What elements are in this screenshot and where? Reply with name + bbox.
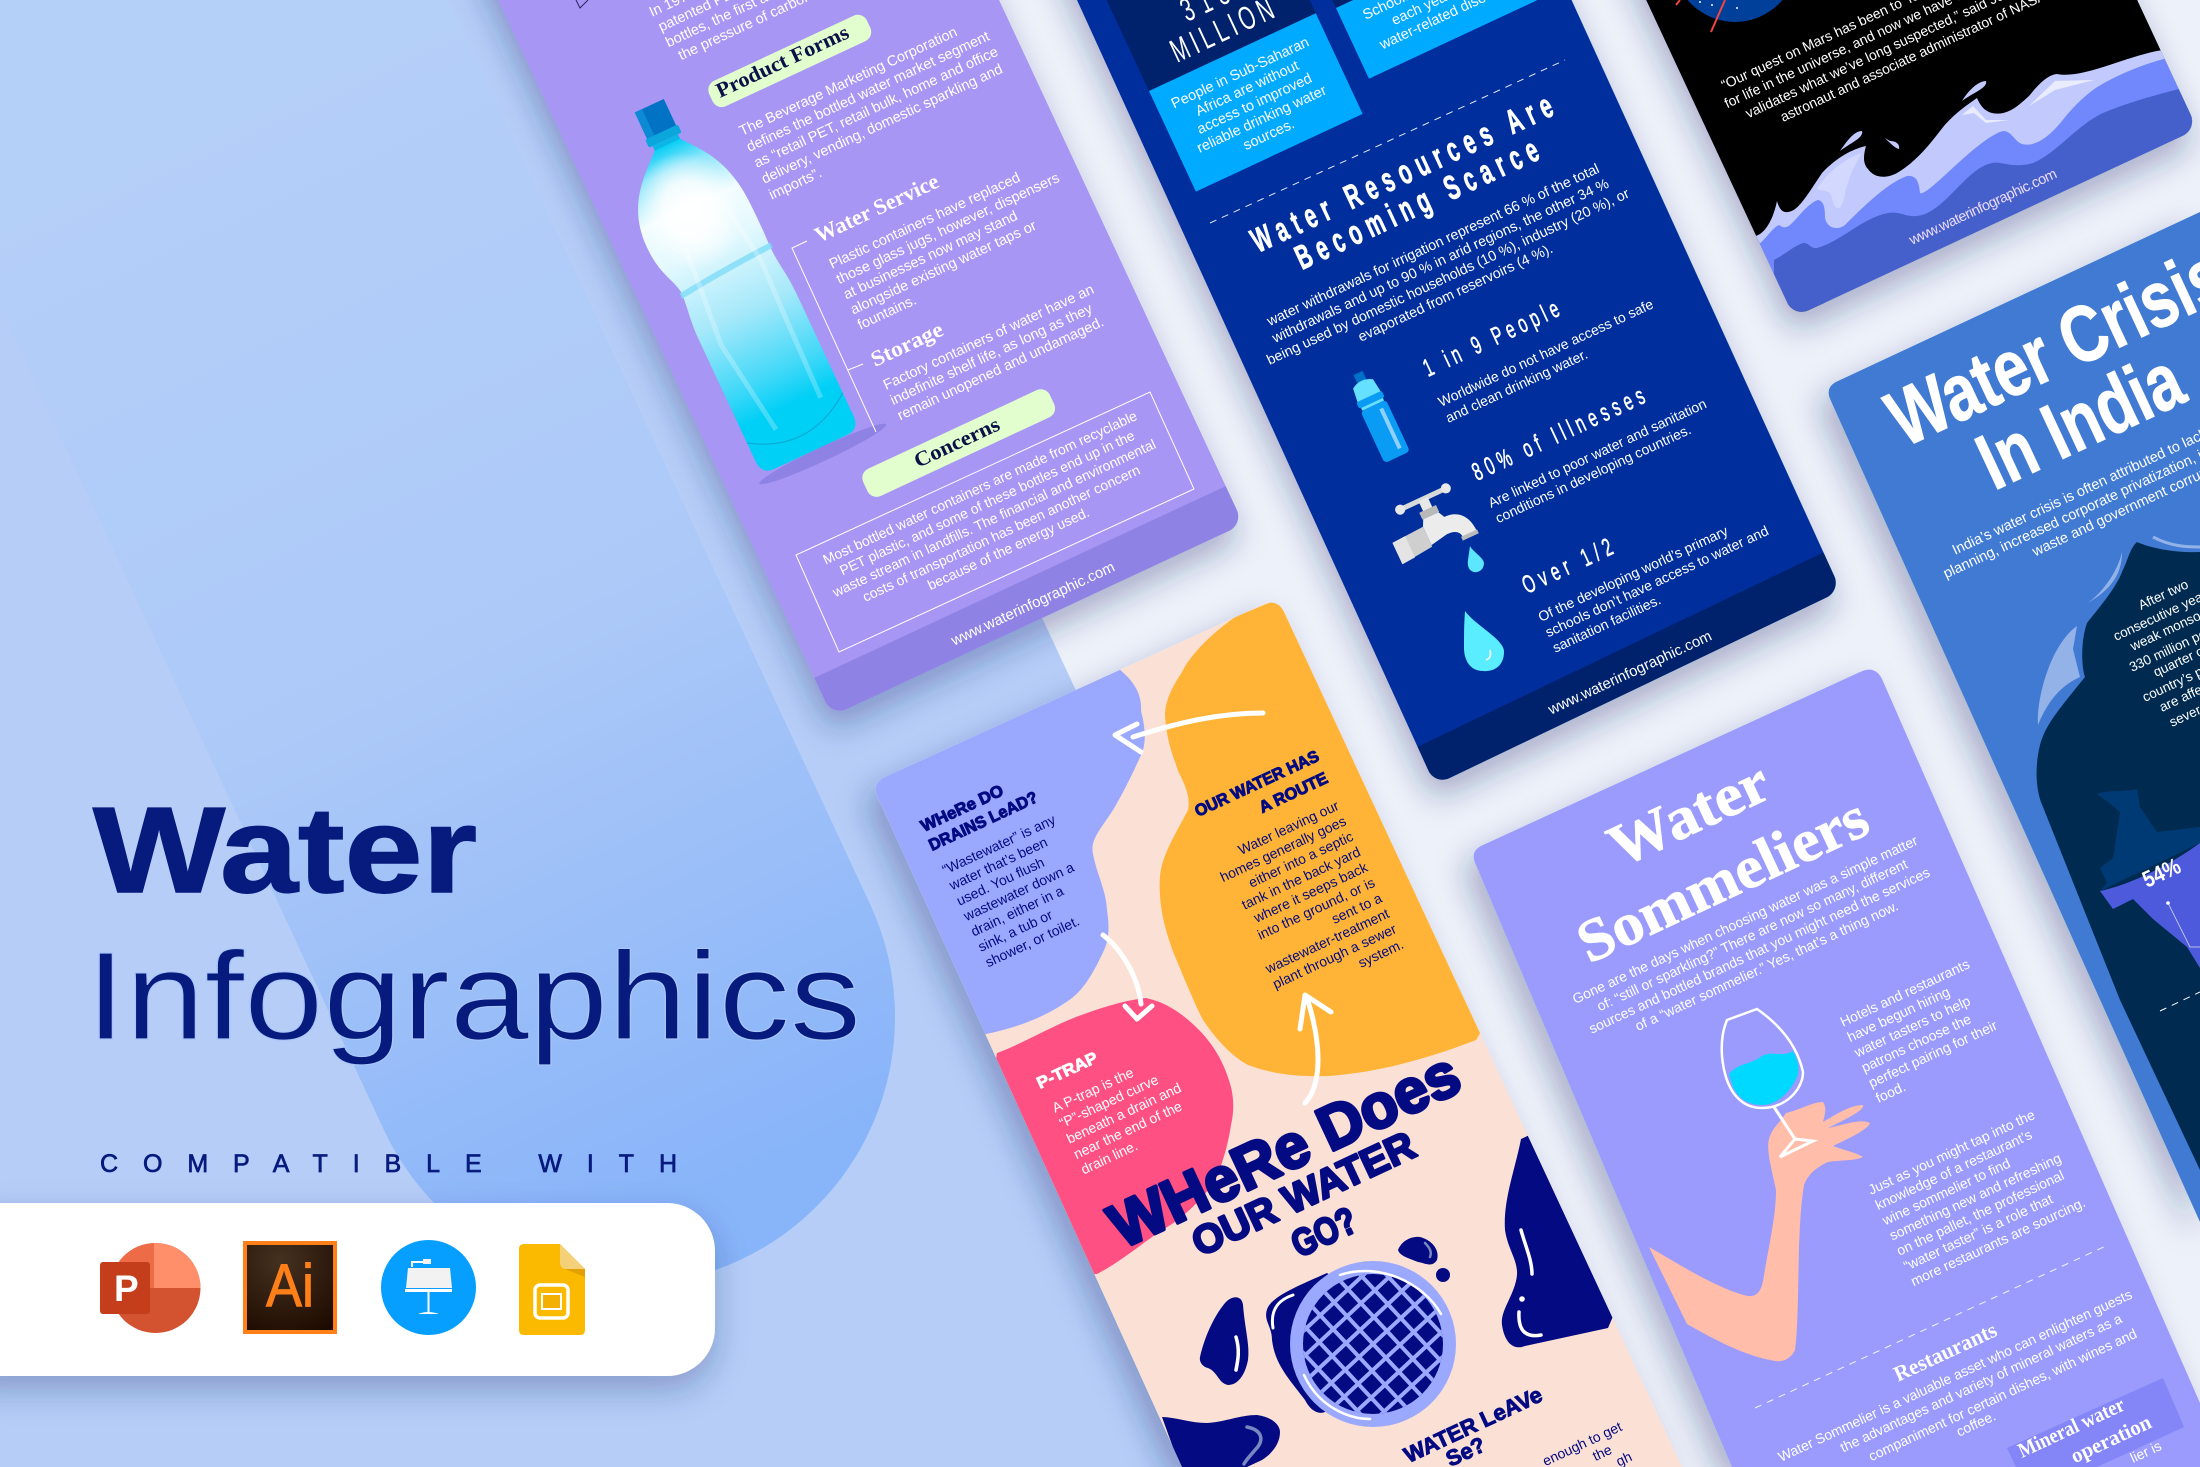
- dark blue card base: [1020, 0, 1841, 785]
- stat: over 1/2: Over 1/2: [1518, 534, 1617, 599]
- heading: Water Resources Are Becoming Scarce: Becoming Scarce: [1289, 131, 1544, 277]
- text: where do drains lead: wastewater down a: [960, 859, 1077, 924]
- text: water service paragraph: Plastic containers have replaced: [827, 170, 1023, 273]
- text: our water has a route: [1192, 747, 1407, 1008]
- text: where do drains lead: WHeRe DO: [918, 782, 1007, 836]
- stat: over 1/2: Of the developing world’s primary: [1536, 523, 1730, 625]
- text: concerns paragraph: PET plastic, and some of these bottles end up in the: [837, 427, 1137, 578]
- heading: Water Sommeliers: Water: [1598, 748, 1780, 880]
- text: our water has a route: A ROUTE: [1256, 769, 1331, 817]
- icon: Illustrator: [245, 1243, 335, 1332]
- text: restaurants paragraph: coffee.: [1954, 1407, 1998, 1440]
- text: intro paragraph: of a “water sommelier.” Yes, that’s a thing now.: [1632, 897, 1901, 1034]
- label pill: Concerns: Concerns: [910, 412, 1003, 473]
- heading: Water Sommeliers: Sommeliers: [1567, 784, 1878, 976]
- text: our water has a route: tank in the back yard: [1239, 843, 1363, 913]
- icon: falling drop: [1468, 546, 1484, 572]
- icon: white highlight dot: [1519, 1296, 1525, 1302]
- text: concerns paragraph: Most bottled water containers are made from recyclable: [820, 407, 1140, 568]
- stat: 1 in 9 people: and clean drinking water.: [1443, 346, 1590, 426]
- black card base: [1540, 0, 2197, 317]
- title: Water Infographics: Infographics: [86, 927, 861, 1066]
- blue card base: [1829, 212, 2200, 1222]
- panel: black NASA card: [1616, 0, 2200, 342]
- stat: 80% of illnesses: 80% of Illnesses: [1468, 382, 1649, 486]
- text: withdrawals paragraph: water withdrawals for irrigation represent 66 % of the total: [1264, 161, 1602, 330]
- bracket connector: [792, 241, 876, 432]
- callout: mineral water source operation: lier is: [2128, 1437, 2164, 1466]
- text: p-trap: beneath a drain and: [1064, 1079, 1184, 1147]
- illustration: planet badge: [1675, 0, 1782, 32]
- text: hotels paragraph: food.: [1873, 1078, 1908, 1106]
- illustration: drain grate: [1290, 1261, 1456, 1427]
- large diagonal capsule shape: [0, 0, 983, 1373]
- text: product forms paragraph: imports”.: [767, 165, 825, 203]
- text: restaurants paragraph: companiment for certain dishes, with wines and: [1866, 1325, 2139, 1464]
- stat: over 1/2: schools don’t have access to water and: [1543, 522, 1771, 640]
- illustration: plastic water bottle: [593, 72, 889, 491]
- text: water service paragraph: fountains.: [855, 292, 919, 334]
- heading: Water Resources Are Becoming Scarce: Water Resources Are: [1245, 87, 1559, 260]
- text: p-trap: drain line.: [1078, 1137, 1140, 1177]
- stat box: 313 million: [1098, 0, 1363, 192]
- text: our water has a route: plant through a sewer: [1270, 920, 1399, 992]
- text: p-trap: A P-trap is the: [1050, 1064, 1136, 1116]
- text: withdrawals paragraph: being used by domestic households (10 %), industry (20 %), or: [1264, 186, 1632, 369]
- label pill: Concerns: [859, 386, 1058, 500]
- panel: purple bottled water card: [452, 0, 1243, 716]
- text: where do drains lead: sink, a tub or: [975, 906, 1055, 955]
- text: restaurants paragraph: Water Sommelier is a valuable asset who can enlighten guests: [1776, 1286, 2134, 1465]
- icon: PowerPoint: P: [114, 1268, 139, 1309]
- text: drought note: After two: [2136, 577, 2191, 613]
- icon: Illustrator: Ai: [266, 1252, 314, 1319]
- illustration: blob highlights: [1236, 1230, 1541, 1464]
- text: our water has a route: OUR WATER HAS: [1192, 747, 1322, 821]
- text: website url: www.waterinfographic.com: [1906, 166, 2060, 249]
- stat box: 313 million: access to improved: [1195, 71, 1315, 138]
- text: product forms paragraph: delivery, vending, domestic sparkling and: [759, 61, 1005, 187]
- arrow: drains to p-trap: [1103, 935, 1152, 1019]
- white pill panel: [0, 1203, 715, 1376]
- text: our water has a route: either into a septic: [1246, 828, 1356, 891]
- label pill: Product Forms: Product Forms: [712, 20, 853, 103]
- icon: water drop: [1464, 611, 1504, 671]
- text: restaurants paragraph: the advantages and variety of mineral waters as a: [1837, 1310, 2124, 1455]
- callout: mineral water source operation: [2007, 1378, 2184, 1467]
- text: p-trap: P-TRAP: [1034, 1049, 1101, 1093]
- text: hotels paragraph: patrons choose the: [1859, 1010, 1974, 1075]
- text: intro paragraph: Gone are the days when choosing water was a simple matter: [1570, 832, 1920, 1007]
- text: where do drains lead: shower, or toilet.: [983, 913, 1082, 970]
- text: drought note: [2111, 577, 2200, 730]
- panel: Water Sommeliers card: [1474, 670, 2200, 1467]
- text: sommelier paragraph: knowledge of a restaurant’s: [1873, 1126, 2034, 1213]
- text: withdrawals paragraph: withdrawals and up to 90 % in arid regions, the other 34 %: [1269, 176, 1612, 347]
- icon: Keynote: [381, 1240, 476, 1335]
- text: product forms paragraph: defines the bottled water market segment: [744, 29, 992, 156]
- heading: Storage: Storage: [867, 316, 947, 372]
- stat: 80% of illnesses: conditions in developing countries.: [1493, 421, 1693, 526]
- text: product forms paragraph: The Beverage Marketing Corporation: [737, 24, 960, 140]
- subtitle: compatible with: COMPATIBLE WITH: [100, 1150, 677, 1178]
- text: concerns paragraph: waste stream in landfills. The financial and environmental: [829, 436, 1158, 601]
- stat: over 1/2: [1518, 507, 1778, 656]
- text: our water has a route: wastewater-treatment: [1262, 905, 1392, 977]
- text: where do drains lead: used. You flush: [954, 854, 1047, 909]
- title: Water Infographics: [86, 782, 861, 1066]
- text: where do drains lead: DRAINS LeAD?: [926, 788, 1041, 855]
- purple card base: [452, 0, 1243, 716]
- stat: over 1/2: sanitation facilities.: [1550, 591, 1663, 656]
- heading: Water Crisis In India: In India: [1964, 334, 2198, 507]
- text: water service paragraph: at businesses now may stand: [841, 208, 1020, 303]
- text: p-trap: [1034, 1049, 1198, 1177]
- heading: Where Does Our Water Go: GO?: [1285, 1200, 1364, 1266]
- text: our water has a route: system.: [1355, 936, 1406, 971]
- text: concerns paragraph: because of the energy used.: [925, 504, 1092, 593]
- stat: 80% of illnesses: Are linked to poor water and sanitation: [1486, 395, 1709, 511]
- map label: 54%: 54%: [2138, 853, 2185, 893]
- text: sommelier paragraph: “water taster” is a role that: [1901, 1191, 2055, 1274]
- left blue background panel: [0, 0, 1438, 1467]
- text: our water has a route: sent to a: [1329, 890, 1385, 927]
- text: where do drains lead: water that’s been: [946, 834, 1050, 894]
- text: hotels paragraph: Hotels and restaurants: [1838, 956, 1972, 1030]
- arrow: route to drains: [1115, 713, 1263, 752]
- icon: PowerPoint: [100, 1243, 200, 1333]
- stat box: 313 million: sources.: [1241, 116, 1297, 154]
- text: intro paragraph: of: “still or sparkling?” There are now so many, different: [1594, 856, 1910, 1014]
- heading: Restaurants: Restaurants: [1890, 1317, 2001, 1387]
- heading: Water Service: Water Service: [811, 168, 943, 248]
- colour blobs: [860, 590, 1500, 1280]
- heading: Where Does Our Water Go: WHeRe Does: [1099, 1039, 1471, 1262]
- text: when does water leave your house: WATER LeAVe: [1400, 1382, 1546, 1467]
- text: p-trap: “P”-shaped curve: [1057, 1071, 1161, 1131]
- stat box: 313 million: People in Sub-Saharan: [1169, 34, 1312, 112]
- text: hotels paragraph: have begun hiring: [1845, 983, 1952, 1045]
- text: concerns paragraph: costs of transportation has been another concern: [860, 462, 1142, 605]
- text: hotels paragraph: water tasters to help: [1851, 992, 1973, 1061]
- periwinkle card base: [1474, 670, 2200, 1467]
- icon: faucet: [1379, 479, 1479, 568]
- stat box: 313 million: reliable drinking water: [1195, 82, 1329, 157]
- text: where do drains lead: “Wastewater” is any: [940, 811, 1058, 878]
- text: website url: www.waterinfographic.com: [1545, 628, 1715, 719]
- text: sommelier paragraph: on the pallet, the professional: [1894, 1167, 2066, 1259]
- text: p-trap: near the end of the: [1071, 1098, 1185, 1162]
- stat: 1 in 9 people: 1 in 9 People: [1419, 295, 1564, 382]
- text: where do drains lead: [918, 782, 1101, 971]
- stat box: 313 million: Africa are without: [1193, 58, 1302, 120]
- icon: Google Slides: [519, 1244, 585, 1335]
- text: storage paragraph: indefinite shelf life, as long as they: [888, 301, 1096, 409]
- label pill: Product Forms: [705, 11, 875, 110]
- title: Water Infographics: Water: [93, 782, 477, 918]
- icon: water bottle: [1345, 367, 1410, 463]
- heading: Where Does Our Water Go: OUR WATER: [1185, 1123, 1422, 1265]
- text: hotels paragraph: perfect pairing for their: [1866, 1017, 2000, 1091]
- card footer band: [814, 486, 1243, 716]
- text: website url: www.waterinfographic.com: [948, 559, 1118, 650]
- stat box: schools: [1285, 0, 1537, 79]
- text: when does water leave your house: [1400, 1382, 1634, 1467]
- text: water service paragraph: those glass jugs, however, dispensers: [834, 170, 1062, 288]
- stat: 1 in 9 people: Worldwide do not have access to safe: [1436, 296, 1656, 410]
- text: sommelier paragraph: Just as you might tap into the: [1866, 1106, 2038, 1198]
- illustration: waves: [1756, 50, 2192, 312]
- panel: dark blue Water Resources card: [1020, 0, 1841, 785]
- arrow: up to route: [1300, 995, 1331, 1103]
- text: when does water leave your house: the: [1590, 1441, 1614, 1464]
- text: where do drains lead: drain, either in a: [968, 882, 1066, 939]
- panel: Water Crisis in India card: [1829, 212, 2200, 1222]
- text: intro paragraph: sources and bottled brands that you might need the services: [1586, 864, 1932, 1037]
- text: our water has a route: where it seeps back: [1250, 858, 1371, 926]
- peach card base: [876, 603, 1682, 1467]
- callout: mineral water source operation: operation: [2067, 1410, 2155, 1467]
- illustration: water blobs: [1162, 1130, 1620, 1467]
- card footer band: [1418, 552, 1841, 785]
- text: storage paragraph: remain unopened and undamaged.: [895, 314, 1106, 424]
- illustration: arm holding glass: [1649, 1009, 1870, 1361]
- icon: small pointer: [576, 0, 588, 8]
- text: sommelier paragraph: more restaurants are sourcing.: [1908, 1194, 2088, 1289]
- text: our water has a route: Water leaving our: [1236, 797, 1342, 858]
- text: our water has a route: into the ground, or is: [1255, 874, 1377, 943]
- illustration: dark bottle shape with India map: [2037, 537, 2200, 1170]
- concerns outline box: [796, 392, 1194, 652]
- text: product forms paragraph: as “retail PET, retail bulk, home and office: [752, 44, 1001, 172]
- text: sommelier paragraph: wine sommelier to find: [1879, 1155, 2013, 1229]
- text: sommelier paragraph: something new and refreshing: [1887, 1150, 2064, 1243]
- text: storage paragraph: Factory containers of water have an: [881, 282, 1097, 394]
- text: our water has a route: homes generally goes: [1218, 813, 1348, 885]
- text: withdrawals paragraph: evaporated from reservoirs (4 %).: [1356, 241, 1556, 345]
- panel: Where Does Our Water Go card: [860, 590, 1682, 1467]
- callout: mineral water source operation: Mineral water: [2014, 1392, 2128, 1463]
- text: water service paragraph: alongside existing water taps or: [848, 218, 1039, 318]
